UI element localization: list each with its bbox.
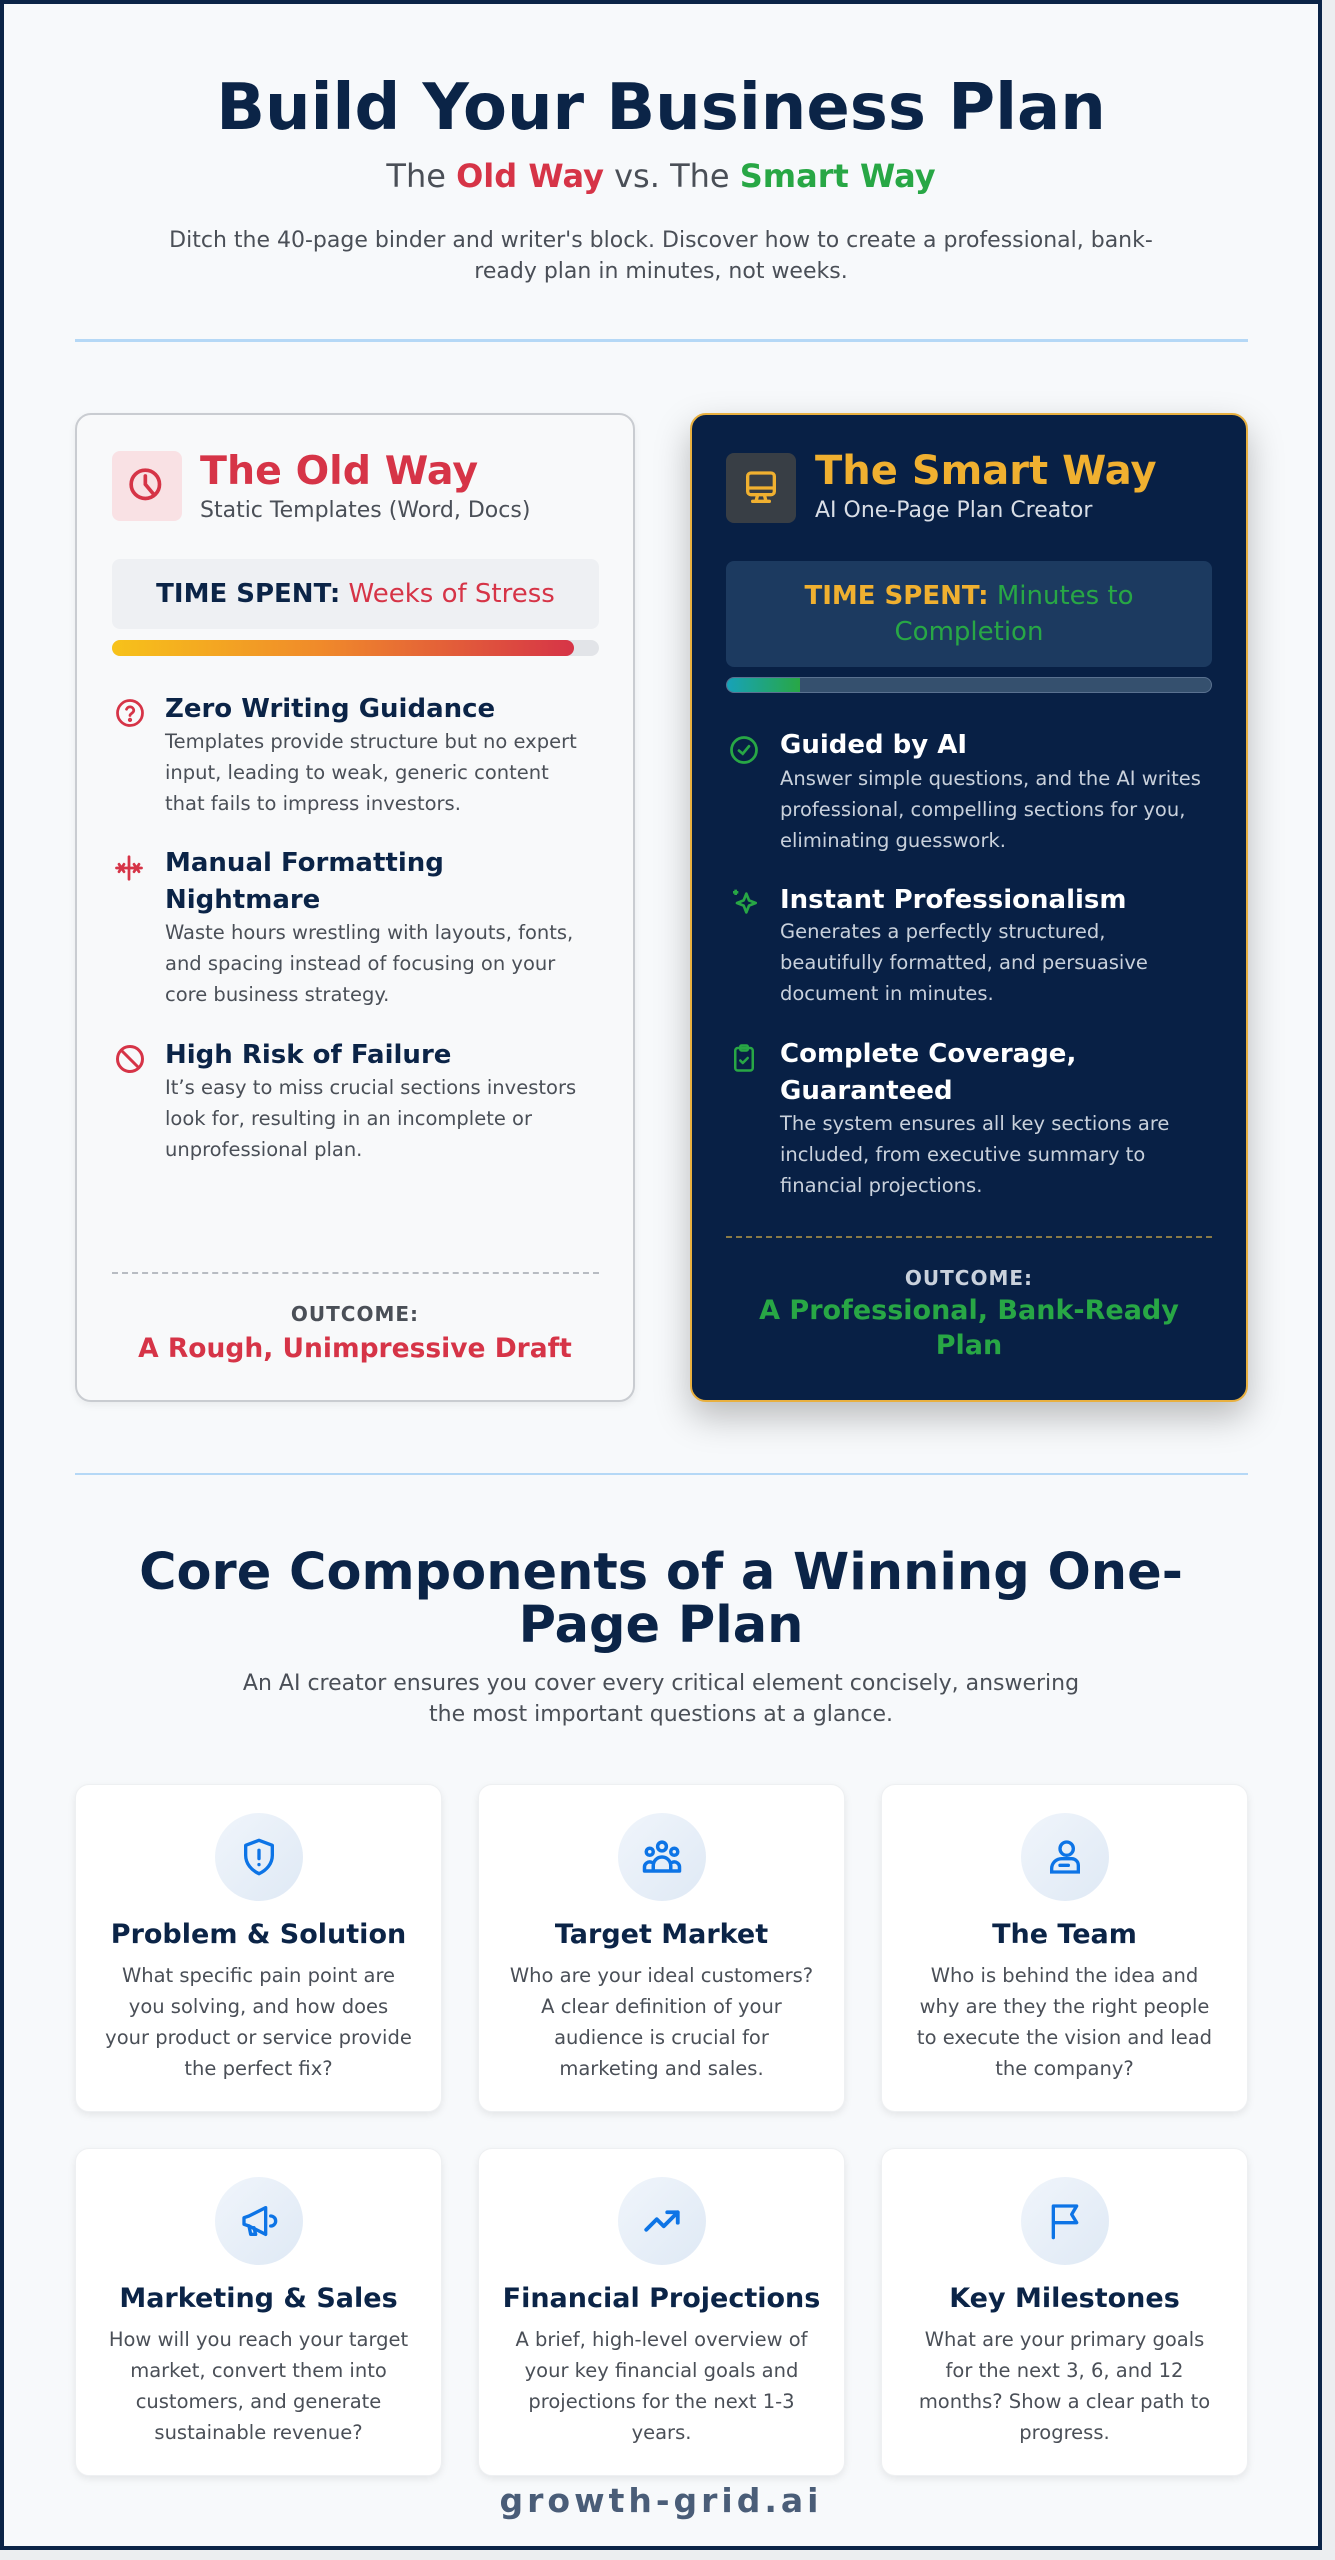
card: milestones: for the next 3, 6, and 12 (946, 2359, 1183, 2382)
card: financial: A brief, high-level overview of (515, 2328, 808, 2351)
item: zero guidance (116, 694, 577, 815)
subheading: Static Templates (Word, Docs) (200, 498, 530, 523)
icon: sparkle (733, 890, 757, 914)
card: the team: Who is behind the idea and (931, 1964, 1198, 1987)
item: coverage: Guaranteed (780, 1076, 953, 1106)
item: guided (730, 730, 1201, 852)
item: guided: eliminating guesswork. (780, 829, 1006, 852)
card: target market: Target Market (555, 1919, 768, 1950)
card: target market (478, 1784, 845, 2112)
outcome: smart: Plan (936, 1330, 1002, 1361)
card: financial: Financial Projections (503, 2283, 820, 2314)
item: formatting: and spacing instead of focusing on your (165, 952, 555, 975)
intro text: Ditch the 40-page binder and writer's block. Discover how to create a professional, bank- (169, 228, 1153, 253)
card: problem & solution: What specific pain point are (122, 1964, 395, 1987)
card: marketing: market, convert them into (130, 2359, 387, 2382)
card: target market: audience is crucial for (554, 2026, 769, 2049)
item: formatting: Manual Formatting (165, 848, 444, 878)
section subtitle: the most important questions at a glance. (429, 1702, 893, 1727)
section title: Core Components of a Winning One- (139, 1543, 1183, 1602)
card: financial: projections for the next 1-3 (528, 2390, 795, 2413)
card: the team (881, 1784, 1248, 2112)
card: milestones (881, 2148, 1248, 2476)
card: problem & solution (75, 1784, 442, 2112)
time spent box: TIME SPENT: Weeks of Stress (156, 579, 555, 609)
time spent box: Completion (895, 617, 1043, 647)
card: target market: Who are your ideal customers? (510, 1964, 813, 1987)
item: high risk: It’s easy to miss crucial sections investors (165, 1076, 576, 1099)
item: coverage: financial projections. (780, 1174, 982, 1197)
item: zero guidance: Templates provide structure but no expert (165, 730, 577, 753)
item: zero guidance: input, leading to weak, generic content (165, 761, 549, 784)
item: formatting: core business strategy. (165, 983, 389, 1006)
section subtitle (243, 1671, 1079, 1727)
card: marketing (75, 2148, 442, 2476)
icon: shield (215, 1813, 303, 1901)
item: instant: Instant Professionalism (780, 885, 1126, 915)
outcome: old: A Rough, Unimpressive Draft (138, 1333, 572, 1364)
icon: formatting (115, 855, 143, 881)
card: the team: to execute the vision and lead (917, 2026, 1212, 2049)
time spent box (726, 561, 1212, 667)
card: problem & solution: you solving, and how does (129, 1995, 388, 2018)
time spent box: TIME SPENT: Minutes to (804, 581, 1134, 611)
outcome: smart (759, 1266, 1179, 1361)
item: formatting: Waste hours wrestling with layouts, fonts, (165, 921, 573, 944)
icon: clipboard (734, 1044, 754, 1072)
card: milestones: What are your primary goals (925, 2328, 1204, 2351)
card: the team: the company? (995, 2057, 1134, 2080)
panel: old way (75, 413, 635, 1402)
card: marketing: Marketing & Sales (119, 2283, 398, 2314)
card: marketing: customers, and generate (136, 2390, 381, 2413)
card: financial (478, 2148, 845, 2476)
card: problem & solution: your product or service provide (105, 2026, 412, 2049)
card: financial: your key financial goals and (525, 2359, 798, 2382)
heading: smart way: The Smart Way (815, 448, 1157, 494)
card: the team: why are they the right people (920, 1995, 1209, 2018)
item: instant (733, 885, 1148, 1005)
outcome: old (138, 1302, 572, 1364)
item: guided: professional, compelling sections for you, (780, 798, 1185, 821)
outcome: smart: OUTCOME: (905, 1266, 1033, 1290)
icon: check circle (730, 736, 758, 764)
item: guided: Answer simple questions, and the AI writes (780, 767, 1201, 790)
item: high risk (116, 1040, 576, 1161)
time spent box (112, 559, 599, 629)
intro text (169, 228, 1153, 284)
item: guided: Guided by AI (780, 730, 967, 760)
item: high risk: look for, resulting in an incomplete or (165, 1107, 532, 1130)
item: coverage (734, 1039, 1169, 1197)
outcome: smart: A Professional, Bank-Ready (759, 1295, 1179, 1326)
subheading: AI One-Page Plan Creator (815, 498, 1092, 523)
item: instant: Generates a perfectly structured, (780, 920, 1105, 943)
progress bar (726, 677, 1212, 693)
section title: Page Plan (519, 1596, 803, 1655)
section title (139, 1543, 1183, 1655)
card: problem & solution: Problem & Solution (111, 1919, 406, 1950)
item: zero guidance: Zero Writing Guidance (165, 694, 495, 724)
icon: person (1021, 1813, 1109, 1901)
card: milestones: Key Milestones (949, 2283, 1180, 2314)
icon: group (618, 1813, 706, 1901)
item: coverage: The system ensures all key sections are (780, 1112, 1169, 1135)
icon: clock (112, 451, 182, 521)
card: marketing: sustainable revenue? (154, 2421, 363, 2444)
card: financial: years. (632, 2421, 691, 2444)
icon: trending up (618, 2177, 706, 2265)
card: target market: A clear definition of your (541, 1995, 782, 2018)
panel: smart way (690, 413, 1248, 1402)
heading: old way: The Old Way (200, 448, 478, 494)
footer brand: growth-grid.ai (500, 2481, 822, 2520)
icon: ban (116, 1045, 144, 1073)
intro text: ready plan in minutes, not weeks. (474, 259, 848, 284)
card: milestones: progress. (1019, 2421, 1110, 2444)
item: coverage: Complete Coverage, (780, 1039, 1076, 1069)
item: instant: beautifully formatted, and persuasive (780, 951, 1148, 974)
card: milestones: months? Show a clear path to (919, 2390, 1210, 2413)
card: marketing: How will you reach your target (109, 2328, 408, 2351)
icon: megaphone (215, 2177, 303, 2265)
card: the team: The Team (992, 1919, 1137, 1950)
item: formatting: Nightmare (165, 885, 320, 915)
icon: question (116, 699, 144, 727)
item: high risk: High Risk of Failure (165, 1040, 451, 1070)
card: target market: marketing and sales. (559, 2057, 764, 2080)
item: formatting (115, 848, 573, 1006)
item: instant: document in minutes. (780, 982, 994, 1005)
subtitle: The Old Way vs. The Smart Way (386, 157, 936, 195)
item: high risk: unprofessional plan. (165, 1138, 362, 1161)
item: zero guidance: that fails to impress investors. (165, 792, 461, 815)
section subtitle: An AI creator ensures you cover every critical element concisely, answering (243, 1671, 1079, 1696)
icon: flag (1021, 2177, 1109, 2265)
item: coverage: included, from executive summary to (780, 1143, 1145, 1166)
card: problem & solution: the perfect fix? (184, 2057, 333, 2080)
outcome: old: OUTCOME: (291, 1302, 419, 1326)
icon: monitor (726, 453, 796, 523)
progress bar (112, 640, 599, 656)
title: Build Your Business Plan (216, 71, 1106, 145)
